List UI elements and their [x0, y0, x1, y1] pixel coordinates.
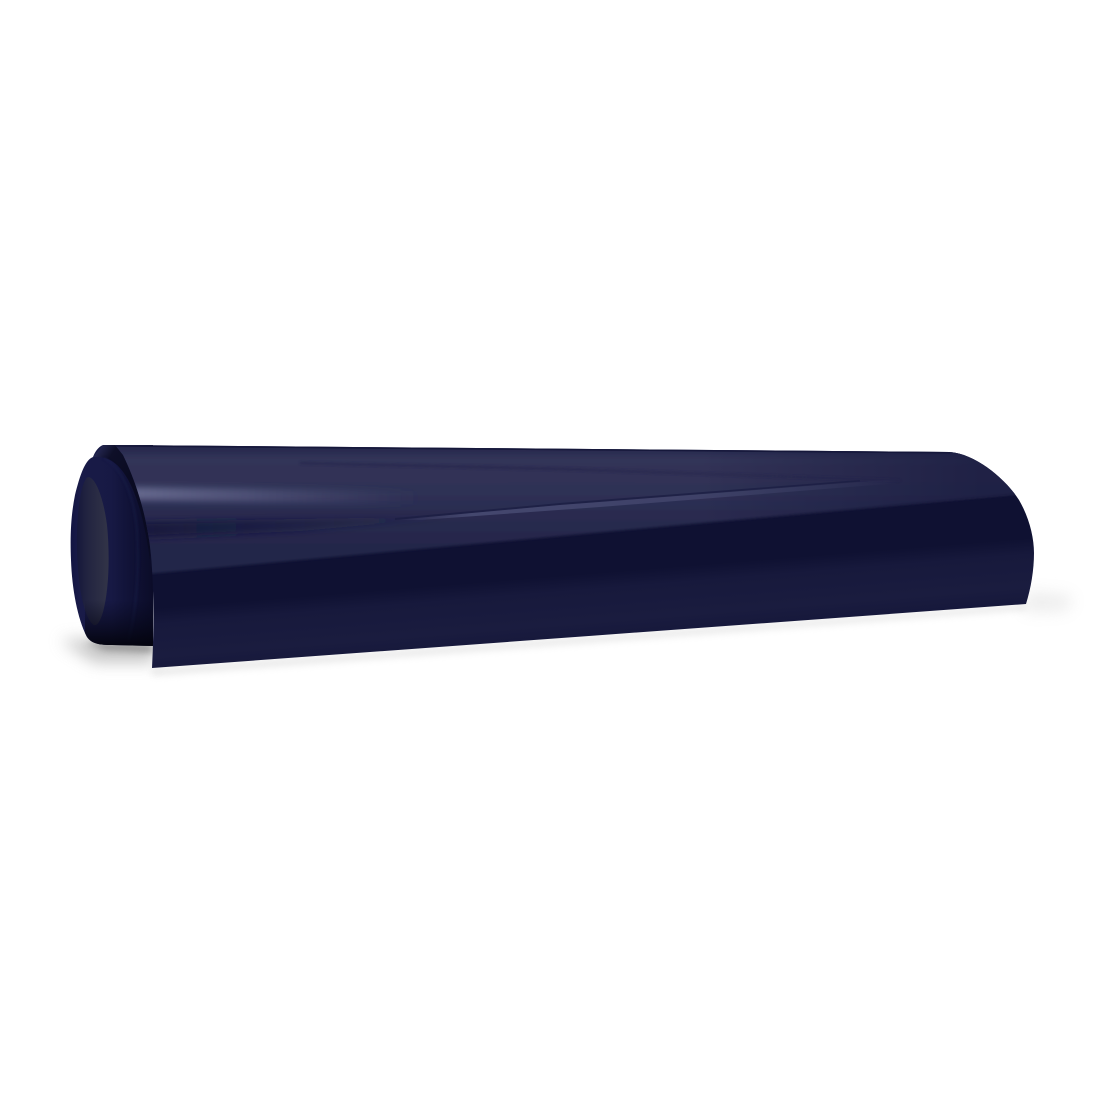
coil ridge: [104, 458, 138, 642]
top edge line: [100, 445, 950, 454]
lower tone band: [152, 445, 1034, 668]
coil bottom shade: [85, 609, 153, 646]
roll end: inner coil: [70, 445, 153, 646]
right side fade: [810, 450, 1015, 506]
highlight glow: [130, 487, 420, 505]
upper hairline: [301, 462, 416, 466]
inner sheet lobe: [93, 445, 150, 560]
thin dark line above streak: [395, 480, 860, 520]
outer coil ring: [70, 445, 153, 646]
floor shadow: [60, 592, 1072, 676]
core hole: [77, 477, 109, 625]
illustration: navy vinyl roll: [62, 445, 1067, 677]
upper glossy band: [116, 445, 1016, 574]
light streak: [414, 484, 832, 520]
front sheet: [115, 445, 1034, 668]
dark fold band: [146, 518, 331, 538]
